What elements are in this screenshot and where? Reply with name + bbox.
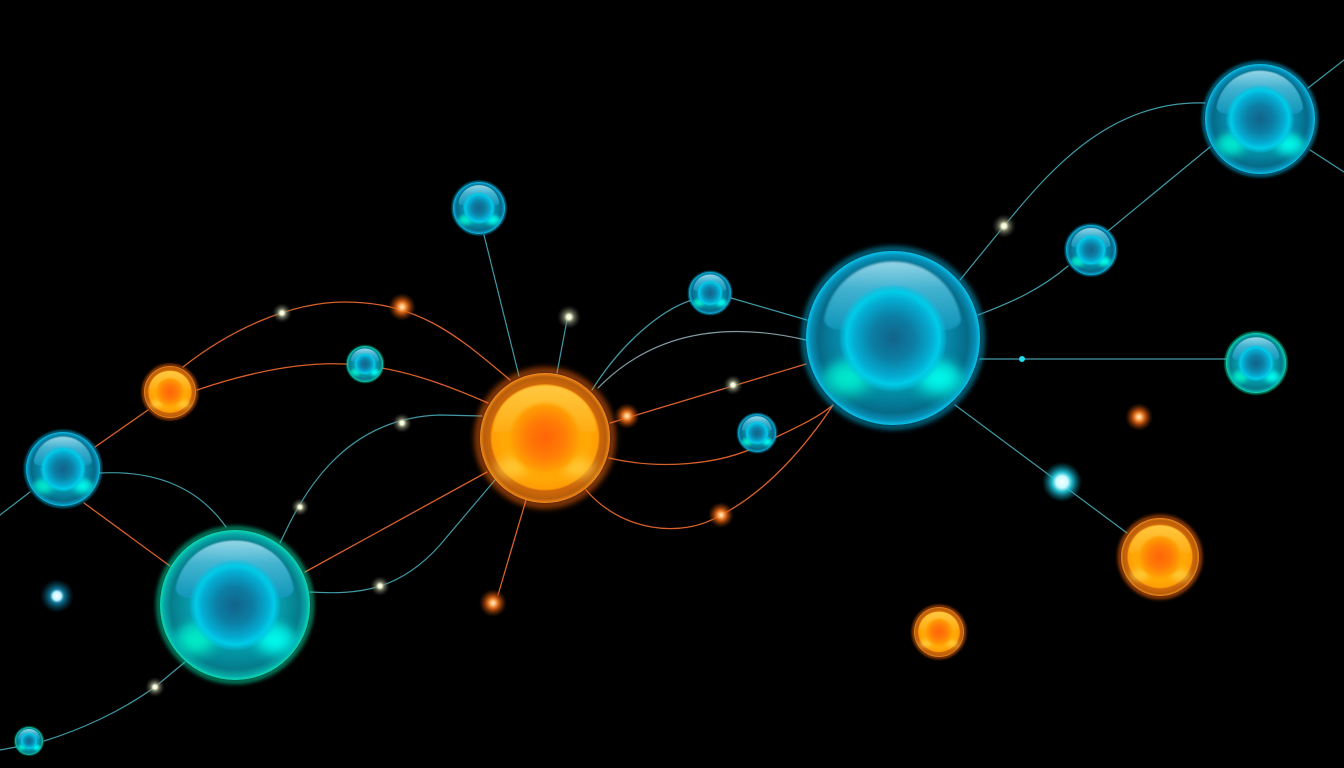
node: small teal sphere [347,346,383,382]
node: orange sphere bottom [913,606,965,658]
node: top right blue sphere [1204,63,1316,175]
node: blue sphere centre [689,272,731,314]
node: tiny teal sphere bottom left [15,727,43,755]
node: large blue sphere [804,249,982,427]
orange connection lines [84,302,833,595]
node: large orange sphere [478,371,612,505]
orange spark dots [388,293,1153,617]
node: teal sphere right [1225,332,1287,394]
node: blue sphere upper right [1066,224,1116,276]
cyan spark dots [40,356,1082,613]
node: orange sphere left [143,365,197,419]
node: blue sphere left [25,431,101,507]
white spark dots [145,214,1016,697]
node: blue sphere top [452,181,506,235]
node: orange sphere lower right [1120,517,1200,597]
node: large teal sphere [158,528,312,682]
node: blue sphere lower centre [738,414,776,452]
